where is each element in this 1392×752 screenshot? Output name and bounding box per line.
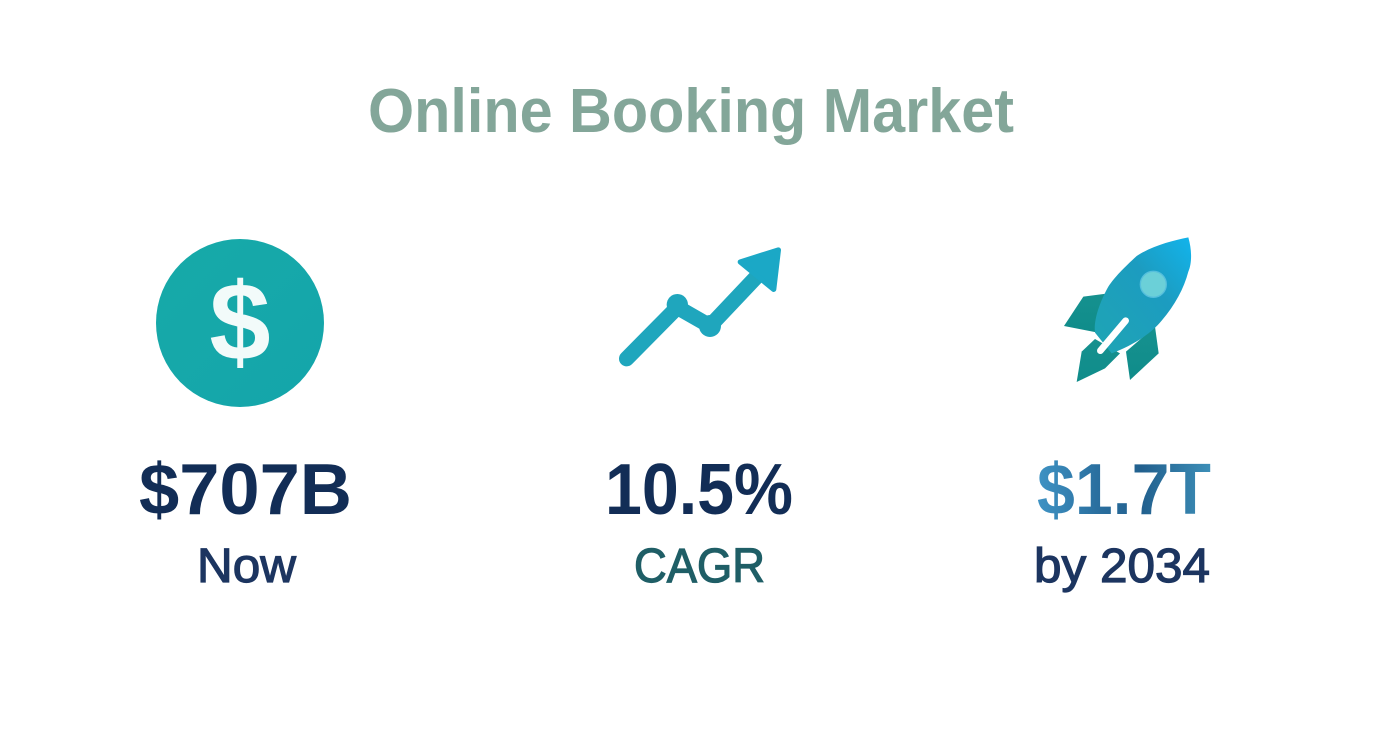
icon: rocket — [1064, 237, 1191, 382]
icon: dollar coin: $ — [209, 261, 271, 384]
label: by 2034: by 2034 — [1034, 540, 1210, 593]
label: Now: Now — [197, 540, 296, 593]
stat: $1.7T: $1.7T — [1037, 450, 1211, 530]
stat: 10.5%: 10.5% — [605, 450, 793, 530]
title: Online Booking Market — [368, 77, 1014, 146]
icon: dollar coin — [156, 239, 324, 407]
stat: $707B: $707B — [139, 450, 352, 530]
label: CAGR: CAGR — [634, 540, 765, 593]
icon: rising trend arrow — [627, 250, 778, 359]
